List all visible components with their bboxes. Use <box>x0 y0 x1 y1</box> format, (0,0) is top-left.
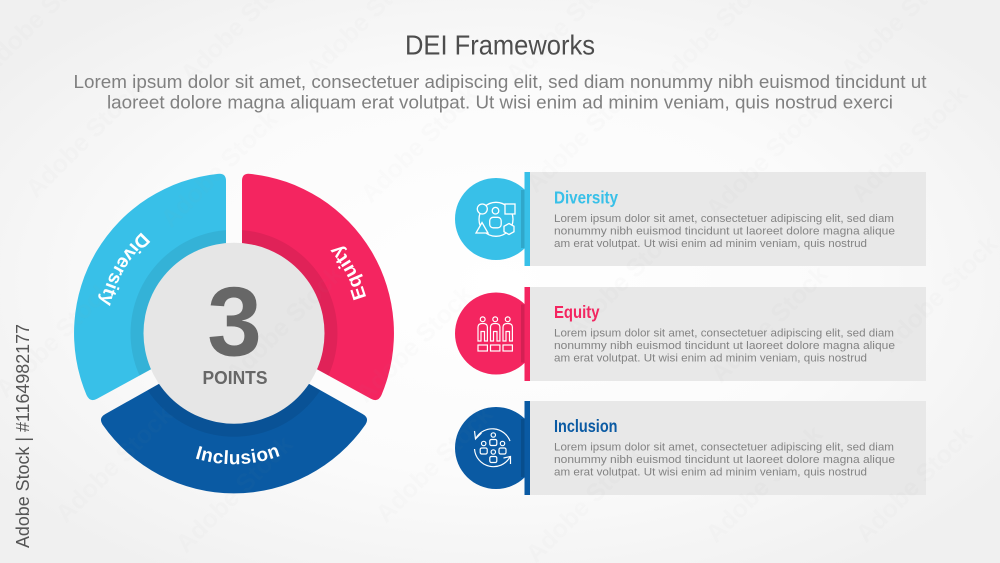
segment: Equity <box>242 174 394 400</box>
card: Diversity <box>455 172 926 266</box>
body text: am erat volutpat. Ut wisi enim ad minim veniam, quis nostrud <box>554 238 867 250</box>
icon: three figures <box>478 317 512 351</box>
card: Inclusion <box>455 401 926 495</box>
stock credit: Adobe Stock | #1164982177 <box>12 324 33 548</box>
watermark pattern: Adobe Stock <box>220 260 348 388</box>
watermark pattern: Adobe Stock <box>845 80 973 208</box>
center badge: 3 points: POINTS <box>202 368 268 388</box>
body text: nonummy nibh euismod tincidunt ut laoreet dolore magna aliquе <box>554 454 895 466</box>
icon: people with cycle arrows <box>474 429 510 467</box>
icon badge: Diversity <box>455 172 537 266</box>
donut chart <box>74 174 394 494</box>
body text: am erat volutpat. Ut wisi enim ad minim veniam, quis nostrud <box>554 466 867 478</box>
subtitle paragraph: Lorem ipsum dolor sit amet, consectetuer adipiscing elit, sed diam nonummy nibh euismod tincidunt ut <box>74 71 927 92</box>
heading: Inclusion <box>554 416 618 436</box>
icon: shapes and person <box>476 202 515 236</box>
watermark pattern: Adobe Stock <box>355 80 483 208</box>
body text: Lorem ipsum dolor sit amet, consectetuer adipiscing elit, sed diam <box>554 328 894 340</box>
body text: nonummy nibh euismod tincidunt ut laoreet dolore magna aliquе <box>554 340 895 352</box>
watermark pattern: Adobe Stock <box>155 105 283 233</box>
watermark pattern: Adobe Stock <box>875 230 1000 358</box>
segment: Inclusion <box>100 384 368 494</box>
watermark pattern: Adobe Stock <box>50 400 178 528</box>
body text <box>554 213 895 250</box>
watermark pattern: Adobe Stock <box>520 70 648 198</box>
heading: Diversity <box>554 188 618 208</box>
heading: Equity <box>554 302 600 322</box>
watermark pattern: Adobe Stock <box>700 95 828 223</box>
subtitle paragraph <box>74 71 927 113</box>
body text: am erat volutpat. Ut wisi enim ad minim veniam, quis nostrud <box>554 352 867 364</box>
center badge: 3 points <box>144 243 324 424</box>
icon badge: Inclusion <box>455 401 537 495</box>
title: DEI Frameworks <box>405 30 595 60</box>
body text: Lorem ipsum dolor sit amet, consectetuer adipiscing elit, sed diam <box>554 442 894 454</box>
segment: Diversity <box>74 174 226 400</box>
icon badge: Equity <box>455 287 537 381</box>
watermark pattern: Adobe Stock <box>20 75 148 203</box>
card: Equity <box>455 287 926 381</box>
segment: Inclusion: Inclusion <box>196 446 280 464</box>
watermark pattern: Adobe Stock <box>560 215 688 343</box>
watermark pattern: Adobe Stock <box>700 420 828 548</box>
body text: nonummy nibh euismod tincidunt ut laoreet dolore magna aliquе <box>554 226 895 238</box>
center badge: 3 points: 3 <box>207 266 262 376</box>
subtitle paragraph: laoreet dolore magna aliquam erat volutpat. Ut wisi enim ad minim veniam, quis nostrud exerci <box>107 92 893 113</box>
body text: Lorem ipsum dolor sit amet, consectetuer adipiscing elit, sed diam <box>554 213 894 225</box>
watermark pattern: Adobe Stock <box>850 420 978 548</box>
segment: Diversity: Diversity <box>98 232 150 306</box>
body text <box>554 442 895 478</box>
segment: Equity: Equity <box>330 246 366 300</box>
body text <box>554 328 895 364</box>
watermark pattern: Adobe Stock <box>350 280 478 408</box>
watermark pattern: Adobe Stock <box>705 260 833 388</box>
watermark pattern: Adobe Stock <box>370 400 498 528</box>
watermark pattern: Adobe Stock <box>170 430 298 558</box>
